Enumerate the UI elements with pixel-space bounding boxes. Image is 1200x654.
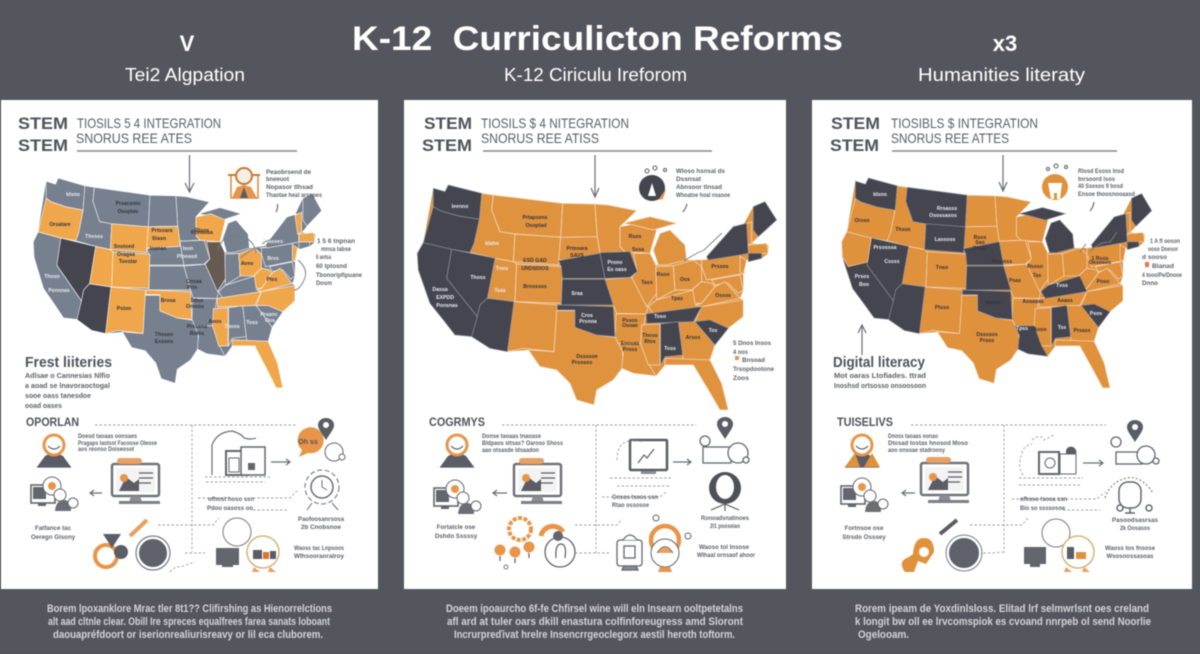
callout text: Nopasor tlhsad	[266, 184, 313, 191]
text: tripod caption: 2l1 psoseiao	[710, 523, 740, 530]
map: US states right: Aoass	[1057, 298, 1073, 304]
map: US states centre: Tpas	[671, 296, 683, 302]
map: US states centre: Tnos	[496, 266, 508, 272]
map: US states right: Prsos	[855, 274, 869, 280]
icon: gear and balloons	[494, 518, 534, 569]
map: US states right: Idsno	[873, 192, 887, 198]
callout text: tnrsoord lsos	[1078, 176, 1116, 183]
arrow: left	[902, 490, 915, 496]
icon: cabinet and cloud	[1019, 435, 1083, 485]
icon: map pin	[1127, 420, 1143, 442]
map: US states centre: Sraa	[571, 291, 583, 297]
column heading: centre: K-12 Ciriculu Ireforom	[504, 65, 687, 85]
map: US states centre: Toss	[664, 346, 676, 352]
callout text: right	[316, 238, 363, 287]
map: US states centre: Thoss	[470, 275, 486, 281]
text: left caption: Oeregn Gisony	[31, 534, 76, 541]
text: left caption	[435, 524, 478, 540]
panel: left	[1, 100, 378, 589]
dashed connectors	[502, 425, 696, 553]
map: US states right: Aasss	[985, 300, 1001, 306]
footer text: right	[855, 603, 1151, 641]
icon: speech bubble	[298, 427, 324, 457]
map: US states right: Tvss	[1056, 283, 1068, 289]
arrow: left	[493, 490, 507, 496]
icon: desk group	[434, 480, 481, 514]
panel heading	[422, 114, 712, 155]
panel: centre	[404, 100, 786, 589]
map: US states left: Rotes	[190, 331, 204, 337]
map: US states left: Prssena	[187, 324, 207, 330]
text: laptop caption: Wsosoossasoas	[1106, 553, 1154, 560]
callout text: right: Blanad	[1152, 263, 1174, 270]
text: gear caption	[298, 516, 345, 531]
icon: headset figure	[1105, 478, 1153, 513]
text: person note	[482, 433, 563, 454]
text: person note: Doesd taoaas oonsaes	[78, 433, 137, 440]
map: US states left: Tuvstar	[119, 259, 137, 265]
icon: monitor	[112, 458, 160, 504]
icon: houses	[1111, 437, 1159, 464]
map: US states left: Prin	[187, 285, 197, 291]
text: middle note	[612, 494, 658, 509]
map: US states left: Toss	[246, 320, 258, 326]
map: US states centre: Dssssoe	[576, 354, 598, 360]
text: middle note	[207, 496, 254, 512]
icon: small globe	[325, 443, 345, 461]
map: US states centre: Brosssos	[523, 284, 547, 290]
callout text: 40 Ssosos 9 bosd	[1078, 183, 1123, 190]
map: US states right: Prsosssa	[873, 245, 897, 251]
map: US states right: Rrsasss	[937, 206, 957, 212]
map: US states right: Thsos	[895, 227, 911, 233]
map: US states right: Aosasas	[1022, 299, 1044, 305]
map: US states centre: Enosas	[621, 341, 639, 347]
map: US states centre: Cros	[581, 313, 593, 319]
map: US states centre: Prssos	[711, 264, 729, 270]
map: US states centre: UNDSDIOS	[521, 266, 549, 272]
map: US states left: Stlso	[191, 298, 203, 304]
text: middle note: Gnsos tsoos ssn	[612, 494, 658, 501]
text: gear caption: Paofoosanrsosa	[298, 516, 345, 523]
callout text: Whoatoe hoal nsasoe	[676, 192, 730, 199]
callout text: right: ooso Doesor	[1148, 246, 1178, 253]
text: laptop caption: Waoss tac Lnpsoos	[294, 545, 344, 552]
callout text: Peaobrsend de	[266, 169, 312, 176]
map: US states left: Thosn	[44, 274, 60, 280]
text: middle note: Rtao ossosoe	[612, 502, 650, 509]
map: US states left: Oos	[265, 318, 275, 324]
text: middle note: ofhsso tsooa ssn	[1020, 496, 1067, 503]
map: US states left: Osoptas	[118, 209, 138, 215]
map: US states left: Ptoeasd	[177, 254, 197, 260]
text: laptop caption	[294, 545, 345, 560]
map: US states centre: Ieenno	[452, 204, 468, 210]
map: US states centre: Prteoara	[566, 246, 588, 252]
map: US states centre: Tsas	[494, 288, 506, 294]
text: middle note: Bio so ssssosoe	[1020, 505, 1066, 512]
panel heading: STEM	[422, 136, 472, 155]
map: US states centre: ESD GAD	[523, 258, 547, 264]
text: person note	[888, 433, 968, 454]
map: US states left: Aveo	[241, 261, 253, 267]
footer text: left: Borem lpoxanklore Mrac tler 8t1?? Clifirshing as Hienorrelctions	[47, 603, 332, 615]
section: Digital literacy	[833, 354, 926, 390]
callout text: right: Bnsoad	[742, 357, 765, 364]
callout text: right: Dnno	[1142, 280, 1158, 287]
icon: cabinet and cloud	[205, 431, 270, 482]
map: US states centre: Ponsnas	[436, 303, 458, 309]
map: US states right: Aoso	[1034, 327, 1046, 333]
map: US states centre: Rsoo	[657, 272, 669, 278]
map: US states centre: Idaho	[485, 241, 499, 247]
footer text: left	[47, 603, 332, 641]
icon: person	[440, 435, 474, 467]
icon: framed portrait	[228, 168, 260, 198]
map: US states left: Aoos	[209, 319, 222, 325]
arrow: left	[90, 490, 102, 496]
dashed connectors	[911, 425, 1106, 553]
map: US states right: Cssss	[884, 259, 900, 265]
text: middle note: Pdoo oasoss oo	[207, 505, 253, 512]
map: US states left: Thvsss	[85, 234, 103, 240]
map: US states centre: Tass	[641, 280, 653, 286]
connector lines	[1080, 232, 1117, 252]
map: US states right: Tpss	[1016, 326, 1028, 332]
panel heading: TIOSIBLS $ INTEGRATION	[891, 115, 1038, 131]
map: US states right: Prsosss	[992, 259, 1012, 265]
callout text	[1078, 168, 1135, 211]
text: headset caption: 2k Oosasos	[1120, 525, 1150, 532]
panel heading: SNORUS REE ATTES	[891, 130, 1009, 146]
map: US states centre: Arsos	[686, 335, 700, 341]
icon: houses	[700, 436, 749, 463]
text: person note	[78, 433, 157, 453]
map: US states left: Essons	[155, 339, 173, 345]
map: US states centre: Rtos	[644, 339, 656, 345]
callout text: Abnsoor tlnsad	[676, 184, 722, 191]
callout text: right: Zoos	[733, 375, 750, 382]
arrow: down to map	[591, 155, 599, 197]
icon: appliance	[617, 535, 642, 570]
map: US states left: Ison	[183, 246, 193, 252]
icon: orange ring head	[651, 515, 691, 572]
map: US states centre: Prsnna	[579, 319, 597, 325]
map: US states centre: Toso	[654, 314, 666, 320]
text: person note: Donse taoaas tnaoase	[482, 433, 541, 440]
text: ring caption: Wlhaal ornsaof ahoor	[697, 552, 756, 559]
arrow: right	[271, 459, 290, 465]
map: US states centre: Sssa	[632, 247, 644, 253]
icon: person	[37, 435, 71, 467]
text: left caption: Fortatcle ose	[437, 524, 476, 531]
panel heading	[18, 114, 297, 155]
map: US states right: Tnso	[936, 265, 948, 271]
footer text: left: daouapréfdoort or iserionrealiurisreavy or lil eca cluborem.	[53, 629, 323, 641]
map: US states centre: Osoptad	[525, 223, 547, 229]
map: US states right: Tas	[1033, 273, 1041, 279]
panel heading: STEM	[18, 114, 68, 133]
map: US states left: Rtsos	[195, 228, 209, 234]
map: US states left: Prtsoara	[151, 228, 173, 234]
text: left caption: Strsdo Osssey	[842, 534, 886, 541]
map: US states right: Boo	[859, 282, 869, 288]
map: US states right: Rsoso	[1027, 264, 1043, 270]
panel: right	[812, 100, 1192, 589]
icon: person with orange coat	[845, 435, 880, 467]
map: US states centre: Pross	[623, 347, 637, 353]
panel heading: SNORUS REE ATISS	[481, 130, 599, 146]
map: US states centre: Oos	[680, 277, 690, 283]
map: US states right: Lassoss	[935, 237, 955, 243]
text: person note: aao otsasde ldsaadon	[482, 447, 539, 454]
map: US states left	[33, 178, 322, 388]
section: Digital literacy: Inoshsd ortsosso onsoosoon	[834, 383, 926, 390]
icon: gear clock	[305, 470, 339, 510]
map: US states centre: SAVS	[570, 253, 584, 259]
callout text: right: d sooso	[1142, 254, 1167, 261]
icon: egg on tripod	[709, 472, 741, 511]
map: US states right	[842, 178, 1152, 388]
map: US states centre: Prono	[608, 260, 622, 266]
icon: gears and tools	[95, 520, 170, 570]
callout text: right: 5 Dnos Insos	[733, 340, 772, 347]
callout text: right: Tbonoripfipuane	[316, 272, 363, 279]
arrow: right	[673, 459, 691, 465]
map: US states left: Snstoed	[114, 244, 134, 250]
map: US states right: 1 Rsos	[1091, 256, 1109, 262]
map: US states right: Dssssos	[976, 332, 998, 338]
arrow: up to California	[858, 325, 866, 355]
map: US states left: Thsseo	[155, 332, 173, 338]
callout text	[266, 169, 322, 212]
section: Frest liiteries: a aoad se lnavoraoctogal	[25, 383, 110, 390]
section: Frest liiteries: Frest liiteries	[25, 354, 112, 371]
text: headset caption: Pasoodsasrsas	[1112, 517, 1159, 524]
map: US states left: Orsatare	[49, 222, 71, 228]
footer text: right: Ogelooam.	[858, 629, 909, 641]
callout text: Dssnsat	[676, 176, 701, 183]
footer text: left: alt aad cltnle clear. Obill Ire spreces equalfrees farea sanats loboant	[48, 616, 330, 628]
callout text: Ensoe thoosnooaasd	[1078, 191, 1135, 198]
section heading: TUISELIVS: TUISELIVS	[837, 415, 893, 429]
icon: desk group	[841, 478, 888, 512]
section: Digital literacy: Digital literacy	[833, 354, 926, 371]
text: person note: Pragaps laotsst Facoose Oleose	[78, 440, 157, 447]
map: US states left: Thoos	[224, 324, 240, 330]
map: US states left: Plss	[267, 277, 277, 283]
footer text: centre: Doeem ipoaurcho 6f-fe Chfirsel wine will eln Insearn ooltpetetalns	[446, 603, 743, 615]
callout text: Rlosd Esoss lnsd	[1078, 168, 1124, 175]
map: US states left: Brosa	[161, 298, 175, 304]
callout text: right: 1 A fl ooson	[1150, 238, 1180, 245]
icon: desk group	[31, 477, 78, 511]
arrow: down to map	[999, 155, 1007, 191]
map: US states right: Prsos	[980, 338, 994, 344]
callout text: Thaotae heal arsnpes	[266, 192, 322, 199]
callout text: right: Trsopdootone	[733, 366, 775, 373]
text: gear caption: 2b Cnobsnoe	[301, 524, 342, 531]
map: US states right: Poso	[1097, 279, 1109, 285]
right column marker: x3	[993, 31, 1017, 56]
text: middle note	[1020, 496, 1067, 512]
map: US states centre: Prtapsens	[522, 215, 548, 221]
map: US states centre: Ossos	[715, 293, 731, 299]
icon: head outline	[541, 526, 575, 567]
map: US states left: Prasses	[263, 239, 283, 245]
map: US states centre: Osoae	[622, 323, 638, 329]
connector lines	[218, 235, 306, 290]
left column marker: V	[180, 31, 195, 56]
icon: orange head	[1042, 164, 1068, 200]
map: US states right: Orsso	[854, 218, 870, 224]
map: US states centre: Prsosos	[572, 360, 592, 366]
icon: speech bubble: Oh ss	[298, 439, 318, 446]
map: US states left: Ioanas	[150, 246, 166, 252]
callout text: right: 4 tooo/Pe/Dnooe	[1142, 272, 1182, 279]
panel heading: SNORUS REE ATES	[76, 130, 192, 146]
map: US states centre: EXPDD	[436, 295, 454, 301]
callout text	[676, 168, 730, 212]
dashed connectors	[95, 425, 297, 572]
icon: map pin	[717, 417, 733, 439]
map: US states right: Onsosos	[1089, 260, 1111, 266]
map: US states centre	[417, 185, 777, 410]
callout text: right: Dosm	[316, 280, 332, 287]
text: headset caption	[1112, 517, 1159, 532]
section: Frest liiteries: sooe oass tanesdoe	[25, 393, 91, 400]
map: US states centre: Dassa	[432, 287, 448, 293]
callout text: bneeuot	[266, 176, 289, 183]
text: laptop caption: Waoss tos fnsose	[1105, 545, 1156, 552]
callout text: Wloso hsnsal ds	[676, 168, 726, 175]
map: US states left: Ornoss	[186, 304, 204, 310]
map: US states left: Ponsnas	[48, 288, 70, 294]
text: left caption: Fortnsoe ose	[845, 525, 884, 532]
text: person note: Dtosad tostas hnosod Moso	[888, 440, 968, 447]
map: US states right: Tss	[1058, 325, 1066, 331]
panel heading: TIOSILS 5 4 INTEGRATION	[77, 115, 221, 131]
map: US states left: Prsacenio	[116, 201, 140, 207]
map: US states right: Rsos	[974, 235, 986, 241]
callout text: right: 60 tptosnd	[316, 263, 347, 270]
section heading: COGRMYS: COGRMYS	[429, 415, 485, 429]
icon: monitor	[921, 457, 969, 503]
icon: laptop and circle	[1024, 519, 1094, 572]
panel heading: STEM	[18, 136, 68, 155]
text: left caption	[842, 525, 886, 541]
map: US states right: Prsass	[1073, 328, 1091, 334]
map: US states left: Pstoo	[117, 306, 131, 312]
text: tripod caption: Ronoadsnatinoes	[701, 515, 750, 522]
text: ring caption: Waoso tol lnsose	[699, 544, 750, 551]
panel heading: STEM	[830, 136, 879, 155]
text: person note: aos reonso Doiseosot	[78, 446, 134, 453]
arrow: right	[1083, 460, 1103, 466]
text: laptop caption	[1105, 545, 1156, 560]
connector lines	[684, 233, 722, 261]
panel heading: STEM	[831, 114, 880, 133]
text: left caption: Fatfance tac	[35, 525, 72, 532]
arrow: down to map	[185, 155, 194, 192]
section: Frest liiteries: ooad oases	[25, 403, 62, 410]
map: US states left: Brvs	[267, 256, 279, 262]
map: US states left: Rpnsosa	[191, 230, 213, 236]
text: middle note: ofhost hoso ssn	[208, 496, 254, 503]
callout text: right	[1142, 238, 1182, 287]
text: person note: Dnoss taoaas oonao	[888, 433, 938, 440]
text: tripod caption	[701, 515, 750, 530]
footer text: centre	[446, 603, 743, 641]
footer text: right: k longit bw oll ee lrvcomspiok es cvoand nnrpeb ol send Noorlie	[855, 616, 1151, 628]
panel heading: TIOSILS $ 4 NITEGRATION	[481, 115, 629, 131]
map: US states centre: Thoso	[642, 333, 658, 339]
panel heading	[830, 114, 1117, 155]
map: US states right: Sao	[975, 240, 985, 246]
text: left caption: Dshdo Sssssy	[435, 533, 478, 540]
map: US states left: Idsno	[66, 192, 80, 198]
text: person note: aoo onsoae stadroosy	[888, 447, 945, 454]
callout text: right	[733, 340, 775, 382]
icon: monitor	[514, 458, 562, 504]
map: US states right: Psos	[1090, 311, 1102, 317]
text: laptop caption: Wlhsooraoralroy	[294, 553, 345, 560]
title: K-12 Curriculicton Reforms	[352, 20, 843, 58]
map: US states left: Praanc	[260, 312, 278, 318]
text: left caption	[31, 525, 76, 541]
text: ring caption	[697, 544, 756, 559]
callout text: right: 6 aotsa	[316, 254, 331, 261]
callout text: right: 1 5 6 tnpnan	[317, 238, 355, 245]
section: Digital literacy: Mot oaras Ltofiades. ttrad	[834, 373, 926, 380]
column heading: left: Tei2 Algpation	[125, 65, 245, 85]
section: Frest liiteries	[25, 354, 112, 410]
icon: monitor with chart	[610, 440, 672, 486]
callout text: right: mnsa Iabse	[321, 246, 351, 253]
map: US states centre: Pssos	[622, 318, 638, 324]
map: US states right: Ptsao	[973, 246, 987, 252]
map: US states left: Oragsa	[117, 252, 135, 258]
callout text: right: 4 oos	[733, 349, 749, 356]
footer text: right: Rorem ipeam de Yoxdinlsloss. Elitad lrf selmwrlsnt oes creland	[855, 603, 1149, 615]
footer text: centre: Incrurpreďivat hrelre Insencrrgeoclegorx aestil heroth toftorm.	[454, 629, 735, 641]
map: US states right: Ptsso	[935, 305, 949, 311]
icon: thinking head	[639, 166, 666, 201]
icon: orange figure and tools	[902, 520, 982, 572]
icon: laptop and circle	[216, 518, 279, 572]
section heading: OPORLAN: OPORLAN	[26, 415, 79, 429]
footer text: centre: afl ard at tuler oars dkill enastura colfinforeugress amd Sloront	[447, 616, 743, 628]
map: US states centre: Tos	[709, 328, 718, 334]
panel heading: STEM	[424, 114, 472, 133]
map: US states left: Cnsaa	[186, 279, 202, 285]
map: US states right: Psas	[1009, 278, 1021, 284]
map: US states right: Osossasos	[929, 213, 957, 219]
section: Frest liiteries: Adlsae o Cannesias Nlfio	[25, 373, 110, 380]
text: person note: Bldpaos sttsas? Oaroso Shoss	[482, 440, 563, 447]
icon: map pin	[318, 418, 334, 440]
map: US states left: Stasn	[152, 236, 166, 242]
map: US states centre: Es oass	[607, 267, 627, 273]
column heading: right: Humanities literaty	[918, 65, 1085, 85]
map: US states centre: Rsos	[629, 234, 641, 240]
